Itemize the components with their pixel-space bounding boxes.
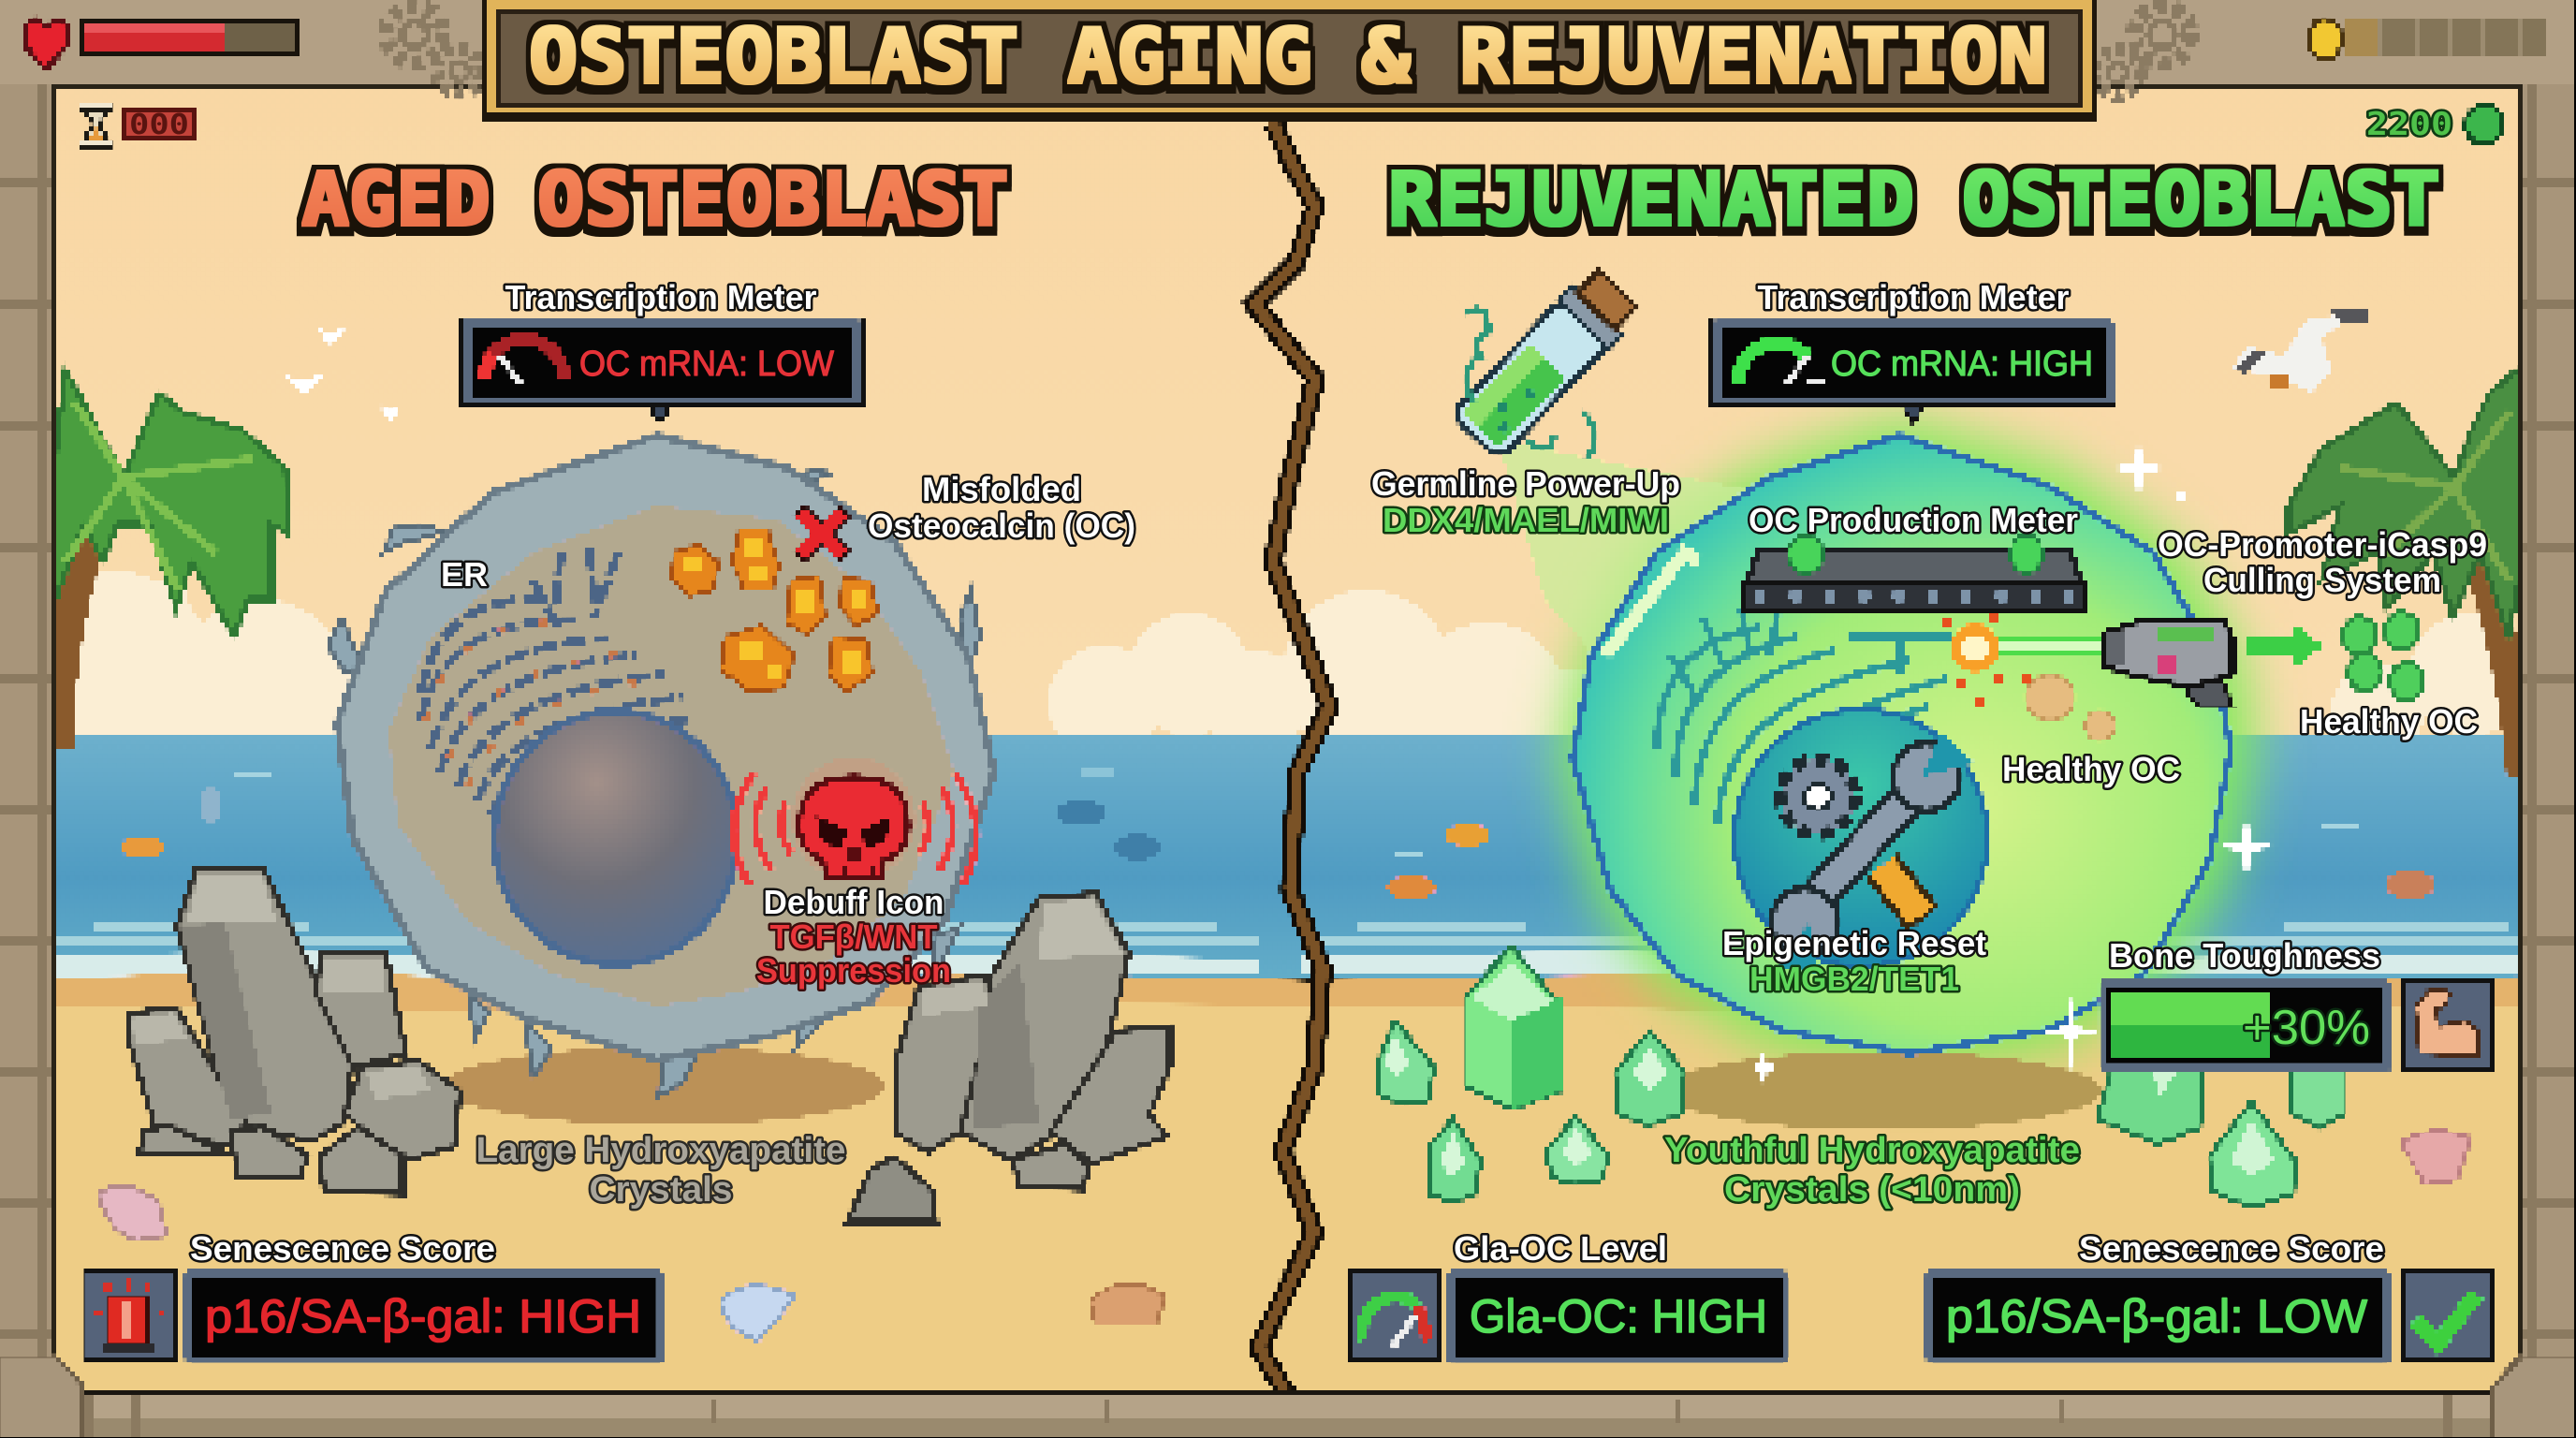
icon: ray gun [2105,620,2232,707]
glow around rejuvenated cell [1559,417,2256,1072]
crystals right of rejuvenated panel [2097,1058,2345,1208]
label: hmgb2 tet1: HMGB2/TET1 [1749,960,1959,998]
fish right side [1387,824,2435,900]
label: ddx4 mael miwi: DDX4/MAEL/MIWI [1383,501,1669,539]
panel: senescence aged [188,1274,662,1360]
label: healthy oc right: Healthy OC [2300,702,2478,741]
title plaque [482,0,2099,122]
healthy OC blobs [2026,675,2115,741]
label: tgf wnt suppression: TGFβ/WNT [769,917,938,956]
panel: gla gauge box [1350,1271,1440,1361]
icon: check mark [2415,1294,2477,1344]
germline beam [1498,440,1778,693]
label: epigenetic reset: Epigenetic Reset [1722,924,1986,962]
rejuvenated osteoblast cell [1573,435,2231,1053]
crystals left of rejuvenated panel [1380,946,1685,1201]
icon: hourglass [80,103,113,147]
shadow under rejuvenated cell [1661,1051,2101,1130]
icon: gla gauge [1362,1297,1428,1346]
label: culling system: Culling System [2203,561,2441,599]
icon: coin [2308,19,2342,60]
gears left [387,7,482,94]
label: healthy oc center: Healthy OC [2002,750,2180,788]
label: senescence score rejuvenated: Senescence Score [2079,1229,2384,1268]
icon: green gem [2466,105,2503,144]
panel: check box [2402,1271,2492,1361]
value: plus thirty percent: +30% [2243,1001,2370,1055]
label: youthful hydroxyapatite crystals: Youthful Hydroxyapatite [1664,1131,2080,1170]
rough ER [421,548,688,824]
aged osteoblast cell [328,435,994,1095]
palm tree right [2289,365,2523,777]
palm tree left [51,370,288,749]
icon: red X [798,509,846,558]
panel: transcription meter aged [461,318,863,423]
label: debuff icon: Debuff Icon [764,883,944,921]
background: wet shore [0,972,2576,1011]
panel: gla-oc level [1451,1274,1786,1360]
label: tgf wnt suppression: Suppression [756,951,951,990]
fish left side [120,770,1162,860]
large hydroxyapatite rocks left [127,868,460,1194]
shells [98,1132,2471,1341]
coin meter [2345,17,2548,58]
divider: cracked central line [1254,122,1329,1400]
nucleus aged [494,712,738,964]
sparkles [1747,431,2276,1088]
shadow under aged cell [444,1047,886,1125]
timer digits: 000 [129,109,189,141]
nucleus rejuvenated [1734,710,1987,966]
corner blocks [0,1357,82,1438]
icon: red siren [94,1279,165,1353]
label: large hydroxyapatite crystals: Crystals [590,1170,732,1210]
icon: gear and wrench [1771,732,1975,974]
heading: aged: AGED OSTEOBLAST [301,158,1009,242]
value: oc mrna high: OC mRNA: HIGH [1831,345,2093,384]
score box 000 [125,110,194,139]
large hydroxyapatite rocks right [895,893,1170,1189]
healthy OC cluster [2343,612,2423,700]
label: transcription meter rejuvenated: Transcription Meter [1758,278,2069,316]
germline power-up vial [1450,264,1644,462]
background: sea [0,733,2576,976]
background: clouds [9,571,2532,777]
icon: flexed arm [2415,989,2479,1056]
label: large hydroxyapatite crystals: Large Hydroxyapatite [476,1131,846,1170]
heading: rejuvenated: REJUVENATED OSTEOBLAST [1388,158,2440,242]
conveyor production meter [1745,536,2084,610]
background: sand [0,988,2576,1437]
icon: green arrow [2248,624,2323,668]
panel: bone toughness bar [2103,983,2387,1069]
label: oc production meter: OC Production Meter [1749,501,2078,539]
icon: red X core [801,513,842,554]
icon: high gauge [1738,343,1823,386]
icon: debuff skull [734,757,976,885]
health bar [82,21,298,54]
seagulls far left [281,328,401,421]
title: OSTEOBLAST AGING & REJUVENATION [529,13,2047,100]
label: bone toughness: Bone Toughness [2109,936,2380,975]
small rock [847,1156,936,1222]
label: culling system: OC-Promoter-iCasp9 [2158,525,2487,564]
icon: heart [24,19,68,69]
panel: senescence aged icon box [84,1271,174,1361]
value: oc mrna low: OC mRNA: LOW [579,345,834,384]
seagull right [2232,309,2368,393]
panel: senescence rejuvenated [1929,1274,2387,1360]
value: p16 high: p16/SA-β-gal: HIGH [205,1290,641,1343]
label: senescence score aged: Senescence Score [190,1229,495,1268]
label: misfolded osteocalcin: Osteocalcin (OC) [868,506,1135,545]
label: transcription meter aged: Transcription Meter [505,278,816,316]
label: youthful hydroxyapatite crystals: Crystals (<10nm) [1724,1170,2020,1210]
label: germline power-up: Germline Power-Up [1371,464,1680,503]
label: gla-oc level: Gla-OC Level [1454,1229,1667,1268]
background: sea waves [51,922,2527,979]
value: p16 low: p16/SA-β-gal: LOW [1946,1290,2368,1343]
value: gla-oc high: Gla-OC: HIGH [1470,1290,1767,1343]
label: misfolded osteocalcin: Misfolded [922,470,1081,508]
gears right [2095,7,2190,95]
icon: low gauge [483,339,564,386]
panel: transcription meter rejuvenated [1711,318,2115,423]
panel: muscle box [2402,979,2492,1069]
misfolded osteocalcin clumps [672,529,878,691]
culling laser beam [1942,613,2111,705]
background: sky [0,0,2576,740]
score digits: 2200 [2366,106,2452,143]
healthy ER [1657,609,1952,843]
label: ER: ER [441,555,488,594]
